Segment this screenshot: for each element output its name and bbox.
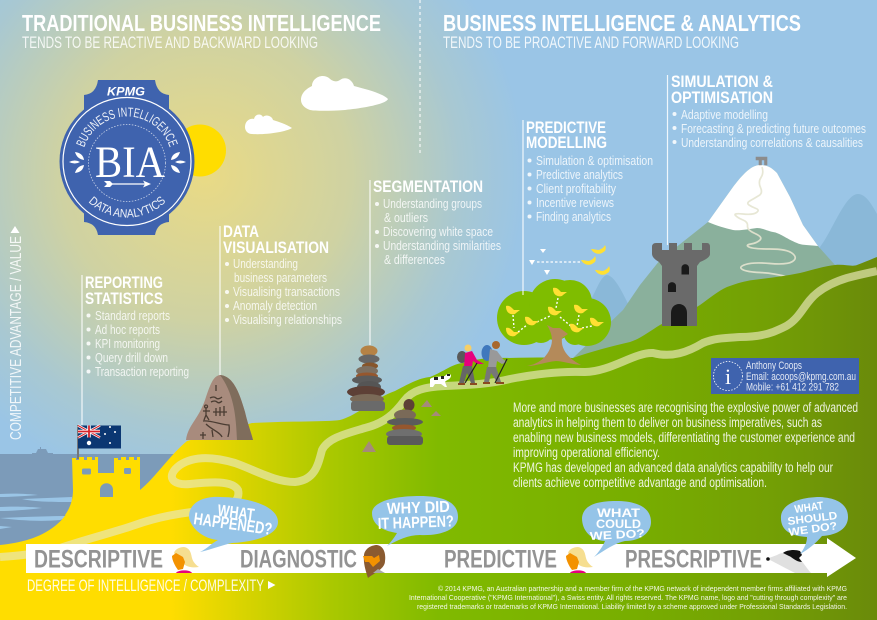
- speech bubble: what could we do: WHAT: [597, 508, 640, 520]
- callout: simulation and optimisation: SIMULATION &: [671, 72, 773, 91]
- icon: hikers and dog: [430, 341, 507, 387]
- callout: predictive modelling: Simulation & optimisation: [536, 154, 653, 168]
- hiker one: [457, 344, 484, 384]
- stage labels: [34, 546, 762, 574]
- body paragraph: improving operational efficiency.: [513, 445, 660, 460]
- small pebbles: [362, 400, 441, 452]
- speech bubble: what could we do: WE DO?: [590, 528, 645, 543]
- icon: BIA badge: [60, 80, 194, 235]
- callout: predictive modelling: Incentive reviews: [536, 196, 614, 210]
- stage labels: PREDICTIVE: [444, 546, 557, 574]
- copyright notice: © 2014 KPMG, an Australian partnership and a member firm of the KPMG network of independent member firms affiliated with KPMG: [438, 584, 847, 593]
- contact box: [711, 358, 859, 394]
- icon: tower: [652, 243, 710, 326]
- ground hill: [0, 257, 877, 620]
- speech bubble: what happened: [189, 497, 278, 552]
- callout: data visualisation: business parameters: [234, 271, 327, 285]
- callout: reporting statistics: Ad hoc reports: [95, 323, 160, 337]
- speech bubble: what should we do: SHOULD: [787, 510, 838, 528]
- icon: small stone stack: [386, 399, 423, 445]
- callout: predictive modelling: Predictive analytics: [536, 168, 623, 182]
- callout: reporting statistics: STATISTICS: [85, 289, 163, 308]
- vertical axis label: COMPETITIVE ADVANTAGE / VALUE: [8, 236, 25, 440]
- speech bubble: why did it happen: IT HAPPEN?: [378, 513, 454, 533]
- contact box: i: [725, 364, 731, 389]
- icon: BIA badge: BUSINESS INTELLIGENCE: [76, 108, 178, 148]
- body paragraph: clients achieve competitive advantage and optimisation.: [513, 475, 767, 490]
- callout: data visualisation: Visualising relationships: [233, 313, 342, 327]
- callout: data visualisation: Visualising transactions: [233, 285, 340, 299]
- speech bubble: why did it happen: [372, 496, 458, 546]
- stage labels: DIAGNOSTIC: [240, 546, 357, 574]
- title: traditional business intelligence: [22, 10, 381, 52]
- title: business intelligence and analytics: TENDS TO BE PROACTIVE AND FORWARD LOOKING: [443, 34, 739, 52]
- copyright notice: [409, 584, 847, 611]
- callout: reporting statistics: REPORTING: [85, 273, 163, 292]
- icon: blonde woman two: [566, 547, 593, 573]
- callout: predictive modelling: [523, 118, 653, 295]
- icon: BIA badge: BIA: [95, 138, 165, 186]
- icon: sun: [174, 124, 226, 176]
- callout: reporting statistics: [82, 273, 189, 425]
- callout: segmentation: Discovering white space: [383, 225, 493, 239]
- column divider: [419, 0, 421, 155]
- icon: BIA badge: DATA ANALYTICS: [88, 196, 165, 218]
- mountain: [573, 157, 860, 358]
- contact box: Mobile: +61 412 291 782: [746, 382, 839, 394]
- title: traditional business intelligence: TRADITIONAL BUSINESS INTELLIGENCE: [22, 10, 381, 36]
- callout: segmentation: SEGMENTATION: [373, 177, 483, 196]
- callout: data visualisation: DATA: [223, 222, 259, 241]
- icon: blonde woman: [172, 547, 199, 573]
- speech bubble: what should we do: WHAT: [794, 500, 824, 516]
- icon: australian flag: [77, 425, 121, 459]
- intelligence arrow bar: [26, 538, 856, 577]
- callout: data visualisation: Understanding: [233, 257, 298, 271]
- callout: reporting statistics: KPI monitoring: [95, 337, 160, 351]
- icon: tree with birds: [497, 279, 611, 366]
- callout: segmentation: & outliers: [384, 211, 428, 225]
- hiker two: [482, 341, 507, 383]
- callout: simulation and optimisation: [668, 72, 866, 245]
- background mountain right: [820, 194, 877, 290]
- stage labels: DESCRIPTIVE: [34, 546, 163, 574]
- icon: brunette woman: [363, 545, 385, 578]
- callout: data visualisation: [220, 222, 342, 375]
- winding trail: [0, 271, 877, 557]
- contact box: Anthony Coops: [746, 360, 802, 372]
- copyright notice: International Cooperative ("KPMG International"), a Swiss entity. All rights reserved. The KPMG name, logo and "cutting through complexity" are: [409, 593, 847, 602]
- icon: dog: [766, 550, 811, 573]
- callout: reporting statistics: Query drill down: [95, 351, 168, 365]
- icon: tall stone stack: [347, 346, 385, 411]
- axis label: degree of intelligence: DEGREE OF INTELLIGENCE / COMPLEXITY: [27, 577, 264, 595]
- icon: sand castle: [65, 457, 140, 515]
- speech bubble: why did it happen: WHY DID: [387, 499, 450, 518]
- sea: [0, 447, 220, 554]
- callout: predictive modelling: MODELLING: [526, 133, 607, 152]
- callout: simulation and optimisation: Adaptive modelling: [681, 108, 768, 122]
- speech bubble: what should we do: WE DO?: [788, 520, 838, 539]
- icon: carved rock: [186, 375, 253, 440]
- icon: dog on trail: [430, 374, 451, 387]
- icon: large cloud: [301, 76, 388, 111]
- callout: data visualisation: VISUALISATION: [223, 238, 329, 257]
- callout: reporting statistics: Transaction reporting: [95, 365, 189, 379]
- icon: small cloud: [245, 115, 292, 134]
- speech bubble: what could we do: COULD: [596, 519, 641, 531]
- stage labels: PRESCRIPTIVE: [625, 546, 762, 574]
- body paragraph: [513, 400, 858, 490]
- speech bubble: what happened: WHAT: [217, 501, 256, 525]
- speech bubble: what happened: HAPPENED?: [192, 509, 273, 539]
- title: business intelligence and analytics: [443, 10, 801, 52]
- callout: segmentation: Understanding similarities: [383, 239, 501, 253]
- title: traditional business intelligence: TENDS TO BE REACTIVE AND BACKWARD LOOKING: [22, 34, 318, 52]
- speech bubble: what should we do: [781, 497, 848, 554]
- icon: BIA badge: KPMG: [107, 84, 145, 98]
- icon: flying birds and pointers: [529, 245, 610, 275]
- copyright notice: registered trademarks or trademarks of KPMG International. Liability limited by a scheme approved under Professional Standards Legislation.: [417, 602, 847, 611]
- background mountain small: [585, 275, 636, 350]
- callout: predictive modelling: PREDICTIVE: [526, 118, 606, 137]
- speech bubble: what could we do: [582, 501, 651, 557]
- callout: data visualisation: Anomaly detection: [233, 299, 317, 313]
- callout: predictive modelling: Client profitability: [536, 182, 617, 196]
- callout: segmentation: [370, 177, 501, 345]
- callout: simulation and optimisation: OPTIMISATION: [671, 88, 773, 107]
- callout: reporting statistics: Standard reports: [95, 309, 170, 323]
- callout: segmentation: & differences: [384, 253, 445, 267]
- callout: segmentation: Understanding groups: [383, 197, 482, 211]
- callout: predictive modelling: Finding analytics: [536, 210, 611, 224]
